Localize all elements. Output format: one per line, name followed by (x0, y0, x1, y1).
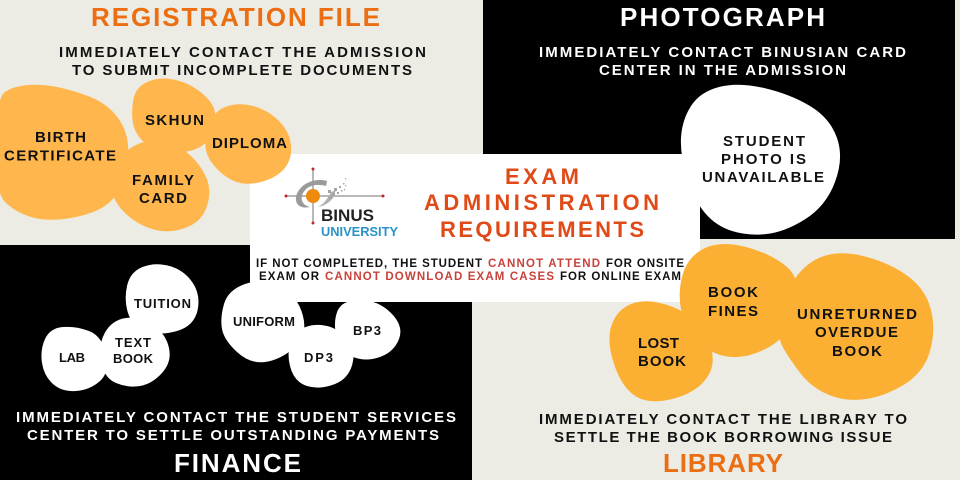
blob: tuition (126, 264, 199, 334)
blob: student photo is unavailable: PHOTO IS (721, 151, 806, 168)
blob: lab (41, 327, 107, 391)
blob: text book (100, 318, 170, 387)
blob: diploma (205, 104, 291, 184)
text: consequence of not completing: EXAM OR (259, 271, 320, 283)
heading: finance: FINANCE (174, 448, 301, 478)
blob: bp3: BP3 (353, 323, 381, 338)
panel: finance background (0, 245, 472, 480)
blob: bp3 (335, 300, 400, 360)
blob: family card: CARD (139, 190, 187, 207)
blob: unreturned overdue book: OVERDUE (815, 324, 898, 341)
blob: birth certificate: CERTIFICATE (4, 148, 116, 164)
blob: book fines: FINES (708, 303, 758, 320)
blob: lost book: LOST (638, 335, 679, 352)
logo: BINUS University (284, 168, 398, 239)
blob: dp3 (289, 325, 354, 388)
text: photograph instruction (539, 44, 906, 79)
blob: uniform: UNIFORM (233, 314, 295, 329)
title: exam administration requirements: REQUIREMENTS (440, 217, 644, 242)
heading: registration file: REGISTRATION FILE (91, 2, 380, 32)
text: consequence of not completing: CANNOT ATTEND (488, 258, 600, 270)
blob: text book: TEXT (115, 335, 151, 350)
text: registration instruction: TO SUBMIT INCOMPLETE DOCUMENTS (72, 62, 412, 79)
blob: lost book: BOOK (638, 353, 686, 370)
text: finance instruction: CENTER TO SETTLE OUTSTANDING PAYMENTS (27, 427, 439, 444)
text: library instruction: IMMEDIATELY CONTACT THE LIBRARY TO (539, 411, 907, 428)
blob: book fines (680, 244, 798, 357)
blob: family card: FAMILY (132, 172, 194, 189)
text: consequence of not completing: FOR ONSITE (606, 258, 684, 270)
title: exam administration requirements (424, 164, 659, 242)
text: finance instruction: IMMEDIATELY CONTACT THE STUDENT SERVICES (16, 409, 456, 426)
blob: skhun (132, 78, 216, 153)
heading: photograph: PHOTOGRAPH (620, 2, 825, 32)
blob: uniform (221, 282, 304, 362)
text: registration instruction: IMMEDIATELY CONTACT THE ADMISSION (59, 44, 426, 61)
blob: unreturned overdue book: BOOK (832, 343, 882, 360)
blob: tuition: TUITION (134, 296, 191, 311)
logo: BINUS University: BINUS (321, 206, 374, 225)
blob: lab: LAB (59, 350, 85, 365)
blob: text book: BOOK (113, 351, 154, 366)
blob: student photo is unavailable: UNAVAILABLE (702, 169, 824, 186)
text: library instruction: SETTLE THE BOOK BORROWING ISSUE (554, 429, 892, 446)
text: finance instruction (16, 409, 456, 444)
blob: student photo is unavailable (681, 85, 840, 235)
blob: family card (112, 141, 209, 231)
blob: diploma: DIPLOMA (212, 135, 287, 152)
text: photograph instruction: CENTER IN THE ADMISSION (599, 62, 846, 79)
blob: student photo is unavailable: STUDENT (723, 133, 805, 150)
text: registration instruction (59, 44, 426, 79)
title: exam administration requirements: EXAM (505, 164, 579, 189)
blob: lost book (609, 301, 713, 401)
panel: photograph background (483, 0, 955, 239)
blob: skhun: SKHUN (145, 112, 204, 129)
blob: birth certificate: BIRTH (35, 129, 86, 146)
blob: unreturned overdue book: UNRETURNED (797, 306, 917, 323)
logo: BINUS University: UNIVERSITY (321, 224, 398, 239)
title: exam administration requirements: ADMINISTRATION (424, 190, 659, 215)
text: consequence of not completing (256, 258, 684, 283)
heading: library: LIBRARY (663, 448, 783, 478)
text: consequence of not completing: CANNOT DOWNLOAD EXAM CASES (325, 271, 554, 283)
blob: book fines: BOOK (708, 284, 758, 301)
text: photograph instruction: IMMEDIATELY CONTACT BINUSIAN CARD (539, 44, 906, 61)
blob: unreturned overdue book (778, 253, 933, 400)
text: consequence of not completing: FOR ONLINE EXAM (560, 271, 681, 283)
blob: birth certificate (0, 85, 128, 220)
blob: dp3: DP3 (304, 350, 333, 365)
text: consequence of not completing: IF NOT COMPLETED, THE STUDENT (256, 258, 482, 270)
panel: center exam administration requirements (250, 154, 700, 302)
text: library instruction (539, 411, 907, 446)
